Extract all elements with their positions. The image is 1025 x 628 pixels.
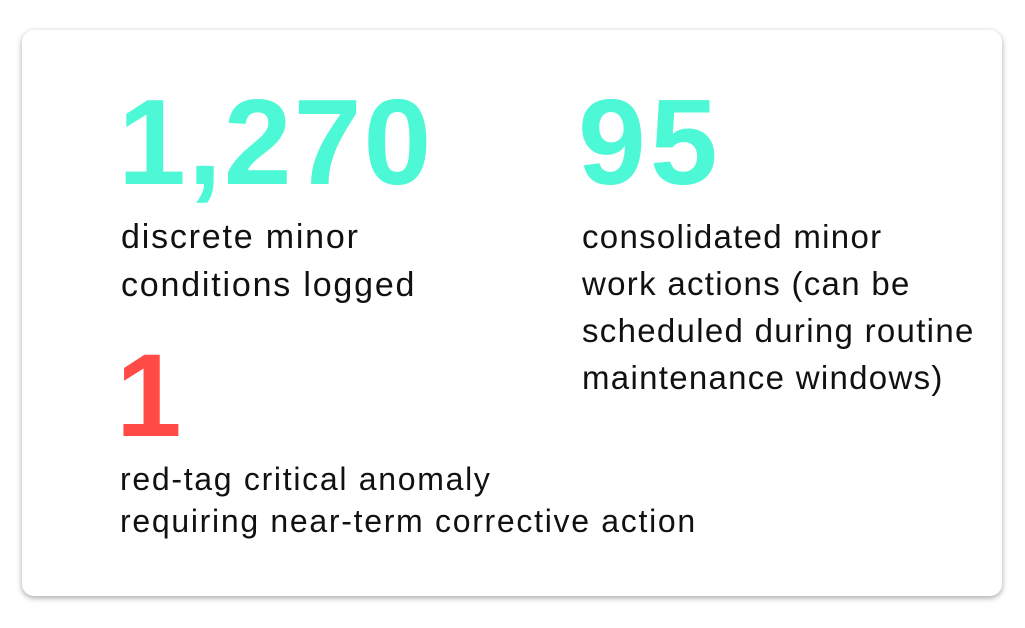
text: red-tag anomaly: [120, 461, 697, 539]
text: consolidated work actions: maintenance windows): [582, 359, 944, 396]
text: discrete minor conditions: discrete minor: [121, 218, 360, 256]
text: consolidated work actions: scheduled during routine: [582, 312, 975, 349]
text: consolidated work actions: consolidated minor: [582, 218, 882, 255]
stat: 1,270: 1,270: [118, 74, 433, 210]
text: consolidated work actions: work actions (can be: [582, 265, 911, 302]
text: discrete minor conditions: conditions logged: [121, 266, 416, 304]
text: discrete minor conditions: [121, 218, 416, 304]
text: consolidated work actions: [582, 218, 975, 396]
text: red-tag anomaly: red-tag critical anomaly: [120, 461, 492, 497]
stat: 95: 95: [578, 74, 722, 210]
stat: 1 red-tag: 1: [116, 330, 184, 462]
text: red-tag anomaly: requiring near-term corrective action: [120, 503, 697, 539]
